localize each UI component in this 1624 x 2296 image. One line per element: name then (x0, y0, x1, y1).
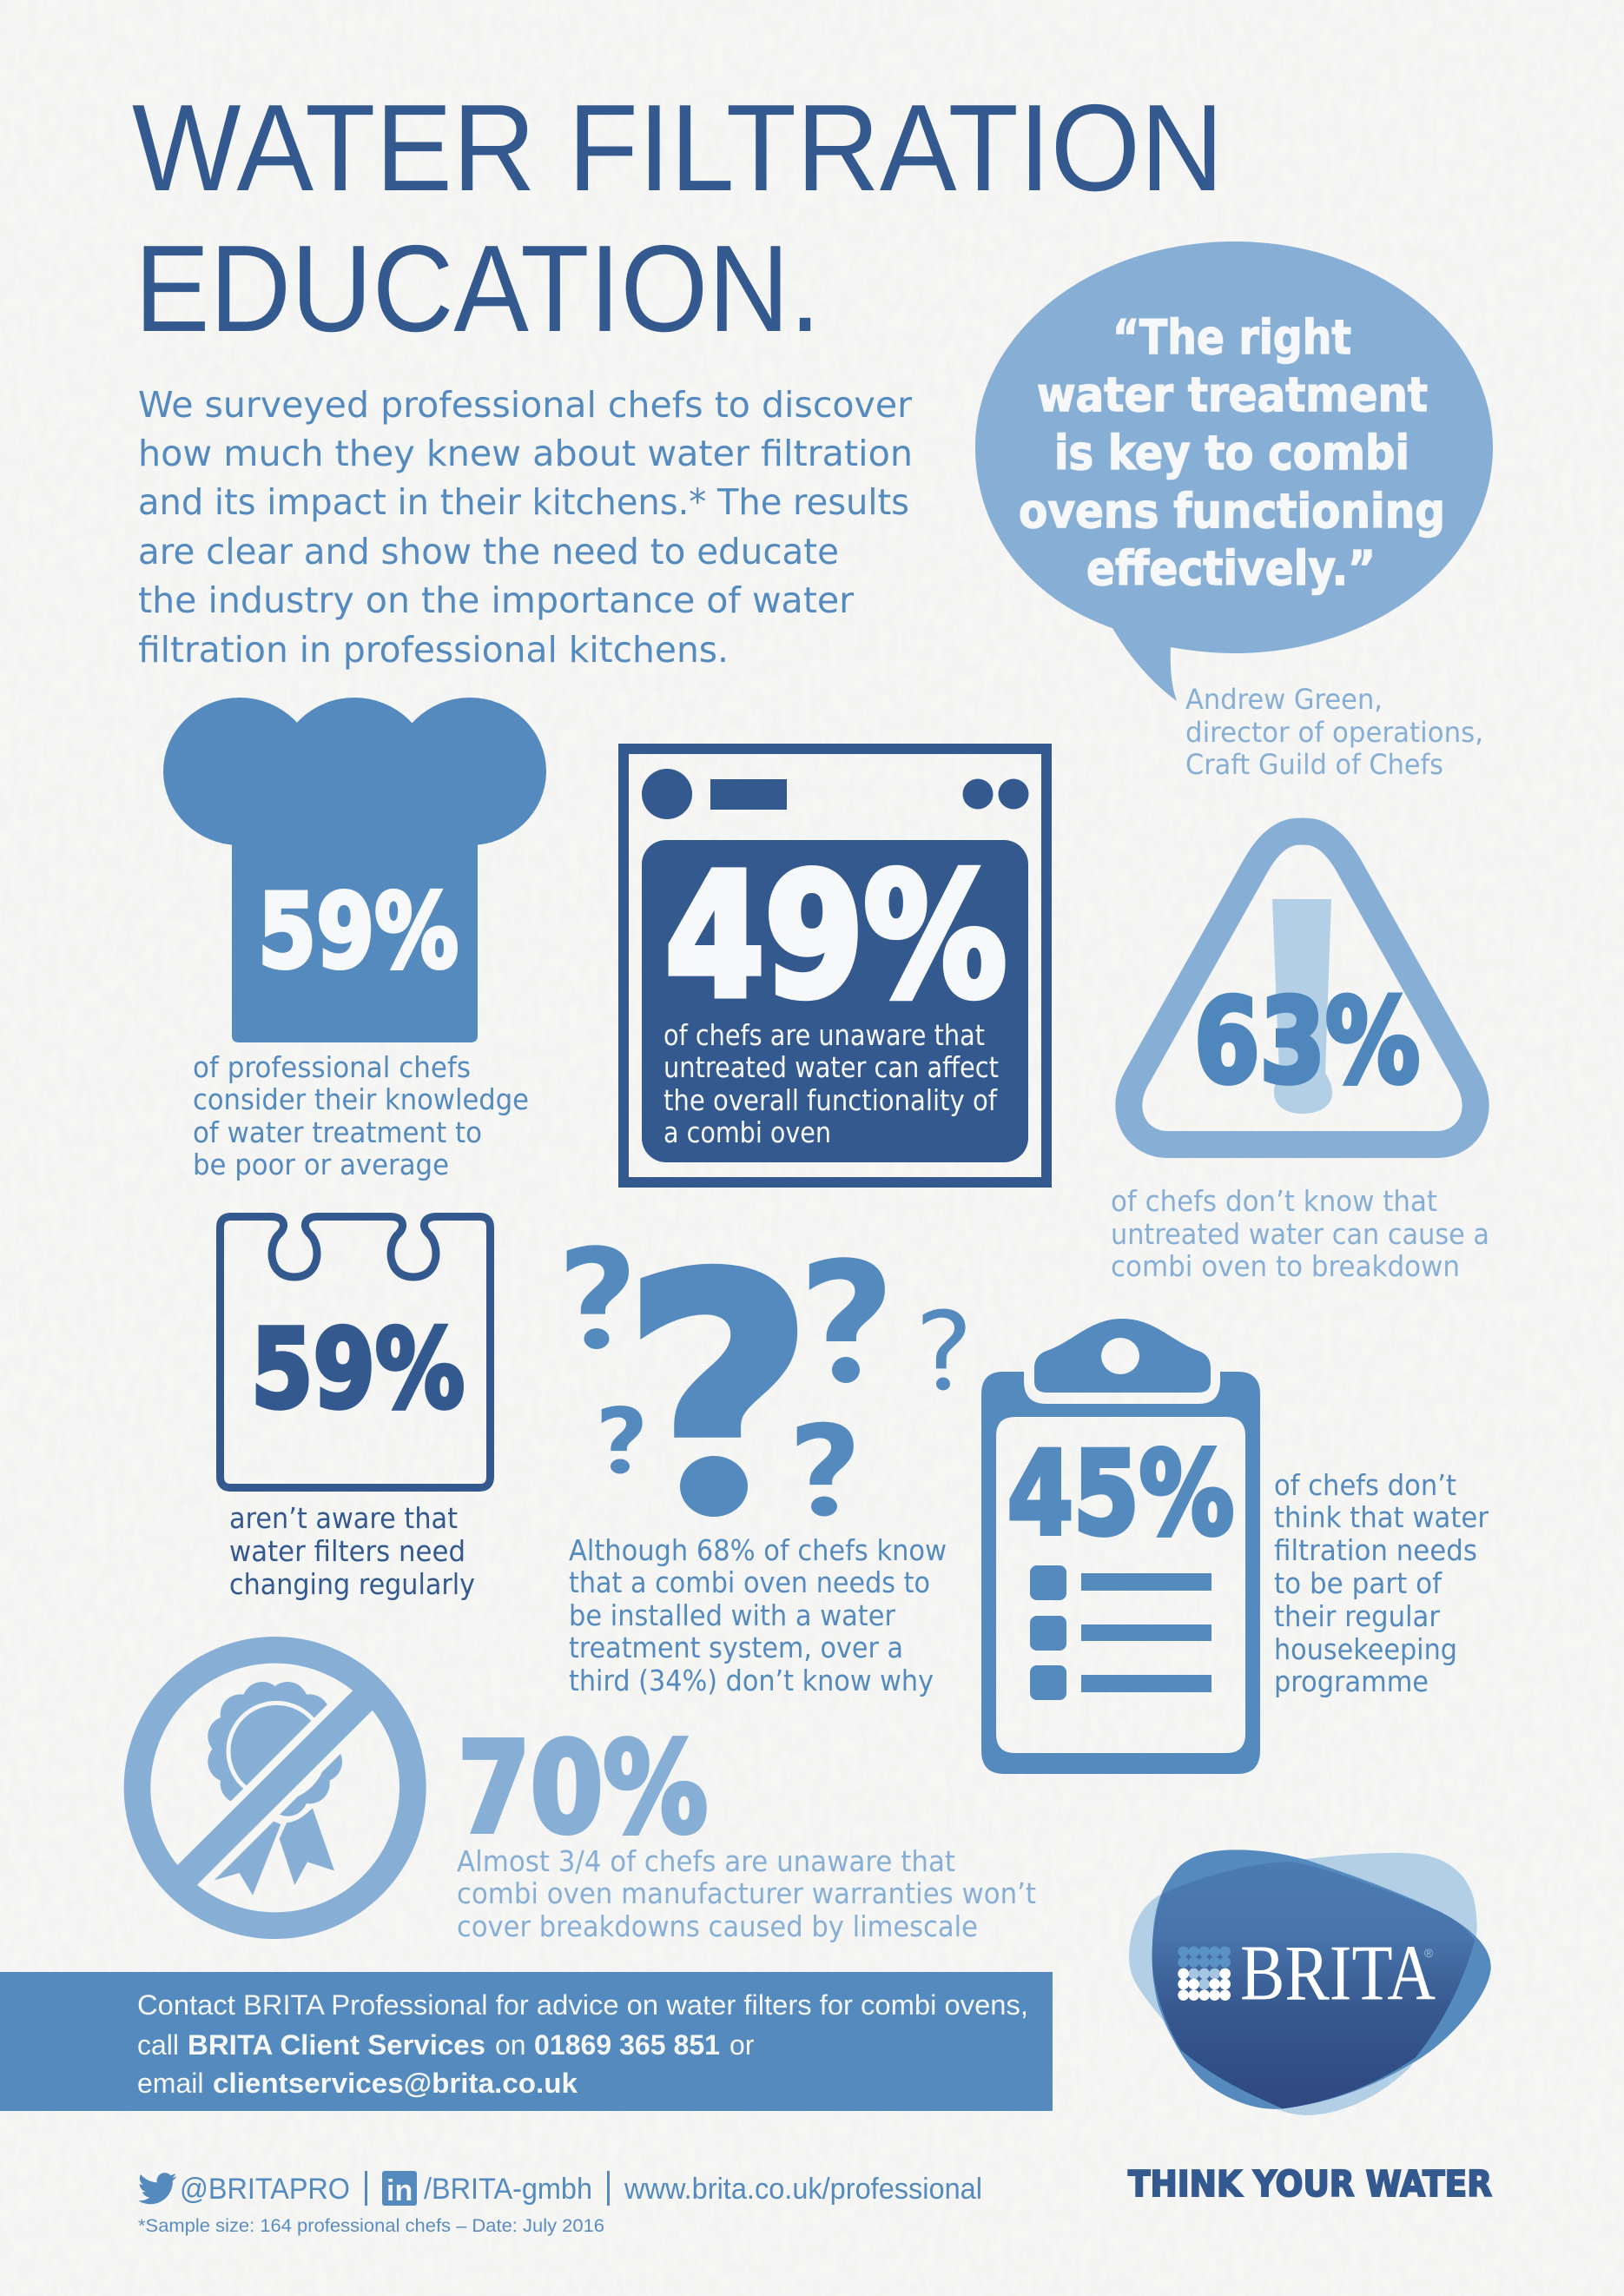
panel: warning triangle 63% (1111, 831, 1489, 1283)
icon: warning triangle (1129, 831, 1475, 1145)
stat: 49%: 49% (665, 837, 1007, 1035)
icon: chef hat (163, 698, 546, 1042)
panel: combi oven 49% (624, 749, 1046, 1182)
linkedin handle: /BRITA-gmbh (424, 2173, 592, 2206)
oven window (642, 840, 1028, 1162)
panel: chef hat 59% (163, 698, 546, 1181)
icon: clipboard (981, 1319, 1260, 1774)
caption: Although 68% of chefs know (569, 1533, 947, 1567)
intro text: We surveyed professional chefs to discover (138, 384, 912, 426)
caption (193, 1050, 529, 1181)
social links footer (138, 2171, 982, 2207)
caption: to be part of (1274, 1566, 1442, 1600)
icon: linkedin: in (386, 2174, 413, 2207)
quote attribution: Craft Guild of Chefs (1185, 748, 1443, 781)
intro text: and its impact in their kitchens.* The results (138, 481, 909, 523)
caption: aren’t aware that (229, 1501, 458, 1535)
caption (1111, 1184, 1489, 1283)
icon: exclamation mark (1272, 899, 1332, 1114)
contact banner: Contact BRITA Professional for advice on water filters for combi ovens, (137, 1989, 1028, 2021)
intro text (138, 384, 913, 671)
caption: housekeeping (1274, 1632, 1457, 1666)
caption: of chefs don’t (1274, 1468, 1456, 1502)
caption: untreated water can cause a (1111, 1217, 1489, 1251)
panel: clipboard 45% (981, 1319, 1489, 1774)
icon: question marks: ? (915, 1288, 973, 1416)
intro text: filtration in professional kitchens. (138, 629, 729, 671)
stat: 70%: 70% (458, 1715, 708, 1861)
icon: question marks (566, 1245, 966, 1517)
website: www.brita.co.uk/professional (624, 2173, 982, 2206)
icon: question marks: ? (621, 1206, 815, 1595)
caption (457, 1844, 1036, 1943)
stat: 63%: 63% (1194, 974, 1420, 1109)
caption (1274, 1468, 1489, 1698)
caption: consider their knowledge (193, 1082, 529, 1116)
caption: the overall functionality of (663, 1083, 998, 1117)
caption: third (34%) don’t know why (569, 1664, 934, 1697)
speech bubble quote: ovens functioning (1019, 484, 1445, 539)
stat: 45%: 45% (1007, 1427, 1234, 1561)
contact banner: or (729, 2029, 755, 2061)
caption: their regular (1274, 1599, 1440, 1633)
icon: question marks: ? (596, 1389, 648, 1495)
quote attribution: Andrew Green, (1185, 683, 1383, 716)
caption: of chefs are unaware that (663, 1018, 985, 1052)
speech bubble quote: water treatment (1037, 367, 1428, 422)
intro text: the industry on the importance of water (138, 579, 854, 621)
contact banner: clientservices@brita.co.uk (213, 2068, 578, 2099)
logo dot grid (1178, 1946, 1231, 2001)
icon: twitter (138, 2173, 176, 2204)
caption: of water treatment to (193, 1115, 482, 1149)
twitter handle: @BRITAPRO (180, 2173, 350, 2206)
caption (229, 1501, 475, 1601)
contact banner: 01869 365 851 (534, 2029, 720, 2061)
speech bubble quote: effectively.” (1086, 541, 1376, 596)
contact banner: on (495, 2029, 526, 2061)
speech bubble quote (975, 242, 1493, 701)
icon: question marks: ? (797, 1226, 896, 1423)
icon: question marks: ? (789, 1399, 862, 1546)
contact banner (0, 1972, 1053, 2111)
speech bubble quote: is key to combi (1054, 426, 1409, 480)
panel: water filter 59% (221, 1216, 490, 1601)
caption: untreated water can affect (663, 1050, 999, 1084)
icon: oven frame (624, 749, 1046, 1182)
caption: be installed with a water (569, 1598, 895, 1632)
title: WATER FILTRATION (132, 79, 1224, 217)
quote attribution: director of operations, (1185, 716, 1483, 749)
caption: of professional chefs (193, 1050, 471, 1084)
caption: treatment system, over a (569, 1631, 903, 1664)
caption: filtration needs (1274, 1533, 1477, 1567)
stat: 59%: 59% (258, 871, 459, 991)
caption: Almost 3/4 of chefs are unaware that (457, 1844, 955, 1878)
caption: combi oven to breakdown (1111, 1249, 1460, 1283)
caption: that a combi oven needs to (569, 1565, 930, 1599)
footnote: *Sample size: 164 professional chefs – Date: July 2016 (138, 2216, 604, 2236)
panel: no warranty 70% (137, 1650, 1036, 1943)
caption: of chefs don’t know that (1111, 1184, 1437, 1218)
BRITA logo (1129, 1849, 1491, 2115)
caption (663, 1018, 999, 1149)
intro text: how much they knew about water filtration (138, 433, 913, 474)
oven controls (642, 769, 1028, 819)
caption: be poor or average (193, 1148, 449, 1181)
tagline: THINK YOUR WATER (1128, 2163, 1492, 2205)
caption: a combi oven (663, 1115, 831, 1149)
panel: question marks (566, 1245, 966, 1697)
caption: changing regularly (229, 1567, 475, 1601)
icon: question marks: ? (558, 1219, 637, 1381)
intro text: are clear and show the need to educate (138, 531, 839, 572)
contact banner: email (137, 2068, 203, 2099)
caption: think that water (1274, 1500, 1489, 1534)
speech bubble quote: “The right (1112, 310, 1351, 365)
contact banner: BRITA Client Services (188, 2029, 485, 2061)
caption: programme (1274, 1664, 1429, 1698)
icon: linkedin (382, 2171, 417, 2207)
caption: cover breakdowns caused by limescale (457, 1909, 978, 1943)
logo wordmark: BRITA (1240, 1929, 1436, 2017)
caption (569, 1533, 947, 1697)
title: EDUCATION. (135, 220, 821, 358)
title (132, 79, 1224, 358)
icon: crossed-out rosette (137, 1650, 413, 1926)
contact banner: call (137, 2029, 179, 2061)
checklist (1030, 1565, 1211, 1700)
caption: combi oven manufacturer warranties won’t (457, 1876, 1036, 1910)
icon: filter outline (221, 1216, 490, 1487)
quote attribution (1185, 683, 1483, 781)
registered mark: ® (1424, 1946, 1434, 1960)
caption: water filters need (229, 1534, 465, 1568)
stat: 59%: 59% (251, 1307, 465, 1433)
